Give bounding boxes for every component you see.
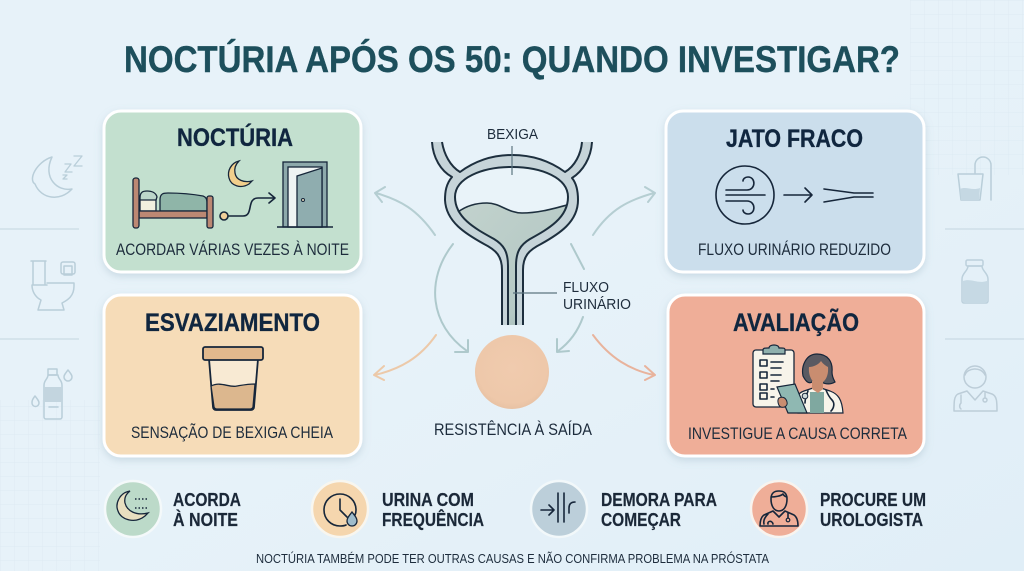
text: URINA COM [382,489,474,510]
icon: moon with zzz [32,156,82,197]
left decorative icons [31,156,82,419]
panel: avaliação [668,295,924,456]
heading: esvaziamento: ESVAZIAMENTO [145,309,320,337]
heading: avaliação: AVALIAÇÃO [733,307,859,337]
legend: urina com frequência [312,481,484,537]
text: PROCURE UM [820,489,926,510]
arrows around bladder [374,187,655,380]
icon: toilet [31,261,75,310]
right decorative icons [954,157,997,411]
icon: narrowing stream [824,189,873,202]
legend: urina com frequência: FREQUÊNCIA [382,509,484,530]
icon: cup [203,347,263,410]
icon: water bottle [32,369,72,419]
footer note: NOCTÚRIA TAMBÉM PODE TER OUTRAS CAUSAS E NÃO CONFIRMA PROBLEMA NA PRÓSTATA [256,551,769,566]
panel: jato fraco [666,111,924,272]
arrow: to noctúria [375,187,435,235]
icon: wind circle [716,166,774,224]
arrow: to jato fraco [593,187,655,235]
bladder [432,142,592,325]
label: fluxo urinário: FLUXO [563,279,609,296]
central bladder diagram [432,126,631,439]
label: bexiga: BEXIGA [487,126,538,143]
heading: noctúria: NOCTÚRIA [177,122,293,152]
label: fluxo urinário [513,279,631,313]
icon: doctor [751,481,807,537]
legend: demora para começar: COMEÇAR [601,509,681,530]
caption: FLUXO URINÁRIO REDUZIDO [698,240,891,259]
label: fluxo urinário: URINÁRIO [563,296,631,313]
panel: esvaziamento [104,295,361,456]
caption: ACORDAR VÁRIAS VEZES À NOITE [116,240,349,259]
label: resistência à saída: RESISTÊNCIA À SAÍDA [434,420,592,439]
legend: demora para começar [531,481,717,537]
icon: doctor [777,354,843,413]
legend: procure um urologista [751,481,926,537]
icon: bed [133,178,213,228]
icon: delayed flow [531,481,587,537]
text: ACORDA [173,489,241,510]
title: NOCTÚRIA APÓS OS 50: QUANDO INVESTIGAR? [124,38,900,80]
heading: jato fraco: JATO FRACO [726,125,863,153]
caption: SENSAÇÃO DE BEXIGA CHEIA [131,422,333,442]
icon: doctor [954,366,997,411]
icon: clock and drop [312,481,368,537]
arrow: flow [784,188,812,202]
arrow: to esvaziamento [374,335,436,380]
label: bexiga [487,126,538,175]
icon: door [277,162,333,227]
caption: INVESTIGUE A CAUSA CORRETA [688,425,907,443]
icon: glass and faucet [958,157,991,200]
arrow: path from bed to door [220,193,275,220]
sphere: resistance [475,335,549,409]
arrow: bladder to sphere right [557,244,584,352]
panel: noctúria [104,111,361,272]
icon: moon [228,161,252,186]
legend: procure um urologista: UROLOGISTA [820,509,923,530]
icon: bottle [962,260,988,303]
icon: clipboard [753,345,794,407]
legend: acorda à noite: À NOITE [173,509,238,530]
legend: acorda à noite [105,481,241,537]
arrow: to avaliação [593,335,655,380]
text: DEMORA PARA [601,489,717,510]
arrow: bladder to sphere left [435,244,468,352]
icon: moon badge [105,481,161,537]
